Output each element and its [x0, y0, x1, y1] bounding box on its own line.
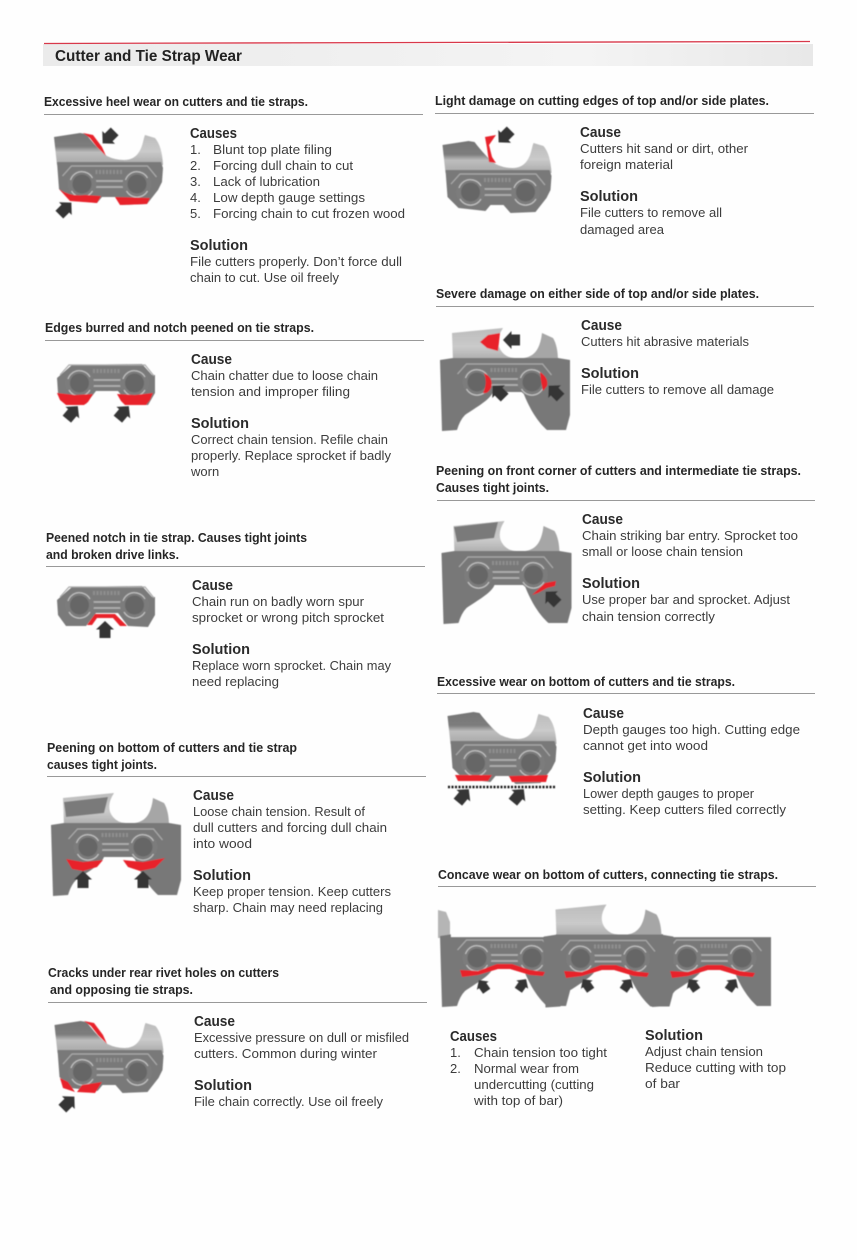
causes list: 4.	[190, 190, 201, 205]
cause: tension and improper filing	[191, 384, 350, 399]
cause: cutters. Common during winter	[194, 1046, 378, 1061]
heading: Concave wear on bottom of cutters, connecting tie straps.	[438, 868, 778, 882]
cause	[580, 125, 749, 172]
cause: Loose chain tension. Result of	[193, 804, 365, 819]
cause: Cause	[582, 512, 623, 528]
causes list: Causes	[190, 126, 237, 142]
cause: Cause	[194, 1014, 235, 1030]
icon: cutter with heel wear	[53, 125, 163, 221]
solution: Lower depth gauges to proper	[583, 786, 755, 801]
panel: peening on bottom	[47, 741, 426, 915]
solution: Solution	[192, 642, 250, 658]
panel: edges burred	[45, 321, 424, 479]
panel: cracks	[48, 966, 427, 1115]
icon: cutter with bottom wear	[448, 712, 556, 808]
solution	[193, 868, 391, 915]
solution	[190, 238, 402, 285]
cause: Cause	[192, 578, 233, 594]
cause: Cause	[191, 352, 232, 368]
solution: File cutters to remove all damage	[581, 382, 774, 397]
causes list: Normal wear from	[474, 1061, 579, 1076]
cause: Chain run on badly worn spur	[192, 594, 365, 609]
panel: excessive heel wear	[44, 95, 423, 285]
cause	[193, 788, 387, 851]
solution	[194, 1078, 383, 1109]
icon: cutter with severe damage	[440, 328, 570, 431]
causes list	[450, 1029, 607, 1108]
causes list: Blunt top plate filing	[213, 142, 332, 157]
solution: damaged area	[580, 222, 665, 237]
icon: cutter with light damage	[442, 124, 552, 213]
causes list: Chain tension too tight	[474, 1045, 607, 1060]
panel: peened notch	[46, 531, 425, 689]
solution	[582, 576, 790, 624]
cause: foreign material	[580, 157, 673, 172]
cause: sprocket or wrong pitch sprocket	[192, 610, 384, 625]
cause: Chain striking bar entry. Sprocket too	[582, 528, 798, 543]
solution: sharp. Chain may need replacing	[193, 900, 383, 915]
icon: cutter with front corner peening	[442, 521, 572, 624]
heading	[47, 741, 297, 772]
icon: cutter with peening on bottom	[51, 793, 181, 896]
cause: Cause	[581, 318, 622, 334]
heading	[48, 966, 279, 997]
causes list: Lack of lubrication	[213, 174, 320, 189]
cause: Cutters hit sand or dirt, other	[580, 141, 749, 156]
heading: and broken drive links.	[46, 548, 179, 562]
solution: Solution	[190, 238, 248, 254]
cause: Cause	[193, 788, 234, 804]
cause: Cause	[580, 125, 621, 141]
solution: File cutters to remove all	[580, 205, 722, 220]
cause	[581, 318, 749, 349]
heading: Peened notch in tie strap. Causes tight joints	[46, 531, 307, 545]
icon: cutter with cracks	[54, 1021, 164, 1115]
solution: Solution	[583, 770, 641, 786]
solution: Reduce cutting with top	[645, 1060, 786, 1075]
solution: Solution	[580, 189, 638, 205]
solution: Solution	[645, 1028, 703, 1044]
cause: Depth gauges too high. Cutting edge	[583, 722, 800, 737]
causes list: 2.	[450, 1061, 461, 1076]
heading: Peening on bottom of cutters and tie strap	[47, 741, 297, 755]
causes list: Low depth gauge settings	[213, 190, 366, 205]
solution: Solution	[581, 366, 639, 382]
heading: Excessive heel wear on cutters and tie straps.	[44, 95, 308, 109]
header band: Cutter and Tie Strap Wear	[43, 42, 813, 66]
causes list: 1.	[190, 142, 201, 157]
solution: chain tension correctly	[582, 609, 716, 624]
solution: Correct chain tension. Refile chain	[191, 432, 388, 447]
cause: Cutters hit abrasive materials	[581, 334, 749, 349]
icon: tie strap with burred edges	[57, 364, 155, 425]
cause: dull cutters and forcing dull chain	[193, 820, 387, 835]
cause: cannot get into wood	[583, 738, 708, 753]
causes list: Forcing chain to cut frozen wood	[213, 206, 405, 221]
heading	[436, 464, 801, 495]
causes list: undercutting (cutting	[474, 1077, 594, 1092]
panel: light damage	[435, 94, 814, 237]
heading: Causes tight joints.	[436, 481, 549, 495]
solution	[580, 189, 722, 237]
causes list: 3.	[190, 174, 201, 189]
solution: Keep proper tension. Keep cutters	[193, 884, 391, 899]
solution: need replacing	[192, 674, 279, 689]
heading: Excessive wear on bottom of cutters and tie straps.	[437, 675, 735, 689]
solution: properly. Replace sprocket if badly	[191, 448, 392, 463]
solution	[190, 416, 392, 479]
causes list	[190, 126, 405, 221]
cause: into wood	[193, 836, 252, 851]
solution: chain to cut. Use oil freely	[190, 270, 339, 285]
panel: severe damage	[436, 287, 814, 431]
panel: peening on front corner	[436, 464, 815, 624]
solution: worn	[190, 464, 219, 479]
solution: File chain correctly. Use oil freely	[194, 1094, 383, 1109]
causes list: Forcing dull chain to cut	[213, 158, 353, 173]
solution: Adjust chain tension	[645, 1044, 763, 1059]
solution: Solution	[193, 868, 251, 884]
cause: Excessive pressure on dull or misfiled	[194, 1030, 409, 1045]
solution: Replace worn sprocket. Chain may	[192, 658, 391, 673]
cause: small or loose chain tension	[582, 544, 743, 559]
causes list: 1.	[450, 1045, 461, 1060]
causes list: 2.	[190, 158, 201, 173]
heading: Light damage on cutting edges of top and/or side plates.	[435, 94, 769, 108]
heading: causes tight joints.	[47, 758, 157, 772]
panel: concave wear	[438, 868, 816, 1108]
solution	[645, 1028, 786, 1091]
heading: Peening on front corner of cutters and intermediate tie straps.	[436, 464, 801, 478]
icon: tie strap with peened notch	[57, 586, 155, 638]
solution	[581, 366, 774, 397]
causes list: with top of bar)	[473, 1093, 563, 1108]
solution: File cutters properly. Don’t force dull	[190, 254, 402, 269]
solution: setting. Keep cutters filed correctly	[583, 802, 787, 817]
cause: Chain chatter due to loose chain	[191, 368, 378, 383]
heading: and opposing tie straps.	[50, 983, 193, 997]
cause	[192, 578, 384, 625]
solution	[583, 770, 787, 817]
causes list: 5.	[190, 206, 201, 221]
heading: Severe damage on either side of top and/or side plates.	[436, 287, 759, 301]
heading: Cracks under rear rivet holes on cutters	[48, 966, 279, 980]
heading	[46, 531, 307, 562]
causes list: Causes	[450, 1029, 497, 1045]
heading: Edges burred and notch peened on tie straps.	[45, 321, 314, 335]
solution	[192, 642, 391, 689]
solution: Solution	[582, 576, 640, 592]
title: Cutter and Tie Strap Wear	[55, 48, 242, 65]
cause	[194, 1014, 409, 1061]
cause	[582, 512, 798, 559]
solution: of bar	[645, 1076, 681, 1091]
cause	[191, 352, 378, 399]
solution: Solution	[191, 416, 249, 432]
panel: excessive wear on bottom	[437, 675, 815, 817]
solution: Use proper bar and sprocket. Adjust	[582, 592, 790, 607]
cause: Cause	[583, 706, 624, 722]
cause	[583, 706, 800, 753]
solution: Solution	[194, 1078, 252, 1094]
icon: three-link chain with concave wear	[438, 904, 780, 1008]
